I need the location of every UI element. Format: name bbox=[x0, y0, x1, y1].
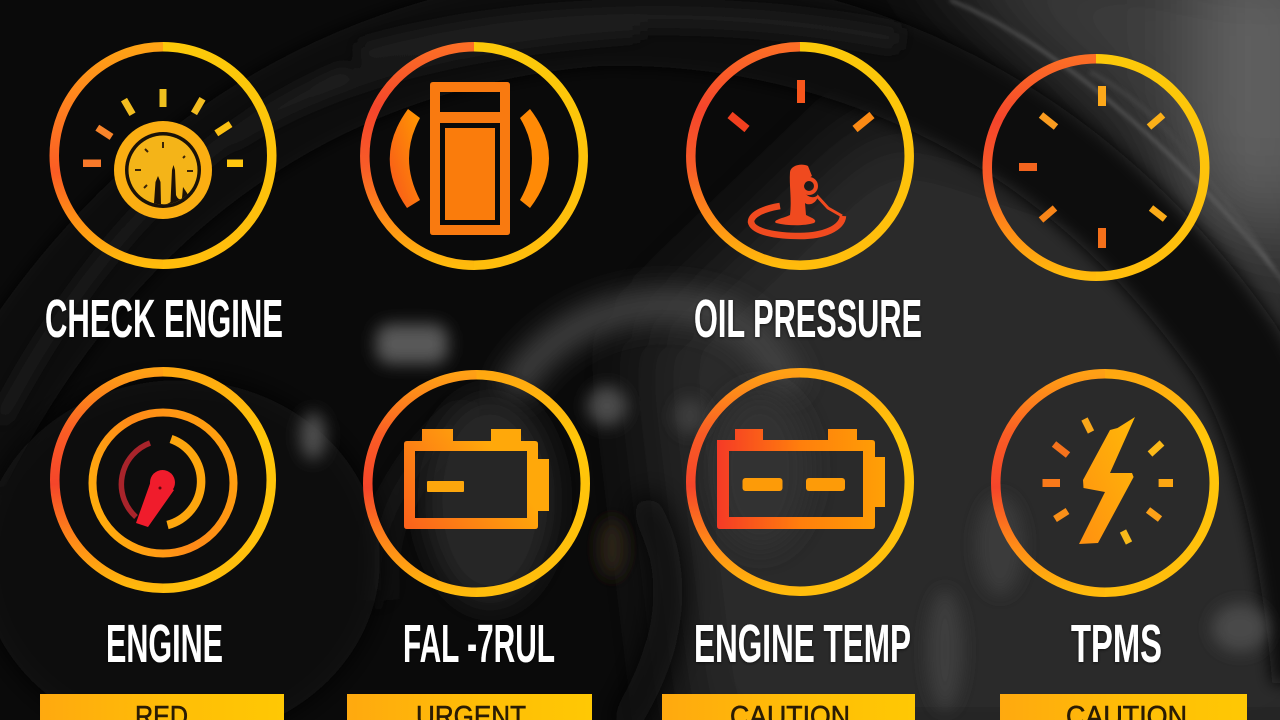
icon: left arc bbox=[390, 109, 420, 208]
label: ENGINE TEMP: ENGINE TEMP bbox=[694, 614, 911, 674]
ring bbox=[996, 374, 1214, 592]
badge: RED bbox=[40, 694, 284, 720]
label: OIL PRESSURE: OIL PRESSURE bbox=[694, 289, 922, 349]
label: TPMS: TPMS bbox=[1071, 614, 1162, 674]
ring bbox=[691, 373, 909, 591]
icon: pump body bbox=[430, 82, 510, 235]
icon: radiating ticks bbox=[83, 89, 243, 167]
label: ENGINE: ENGINE bbox=[106, 614, 223, 674]
icon: engine dial bbox=[114, 121, 212, 219]
badge: URGENT bbox=[347, 694, 592, 720]
ring bbox=[368, 375, 585, 592]
badge: CAUTION bbox=[1000, 694, 1247, 720]
label: CHECK ENGINE: CHECK ENGINE bbox=[45, 289, 283, 349]
icon: battery bbox=[404, 429, 549, 529]
icon: right arc bbox=[168, 439, 201, 525]
panel: engine gauge bbox=[55, 372, 271, 588]
icon: bolt bbox=[1079, 417, 1135, 544]
panel: oil pressure bbox=[691, 47, 909, 265]
panel: fuel door unlabelled light bbox=[365, 47, 583, 265]
label: FAL -7RUL: FAL -7RUL bbox=[403, 614, 555, 674]
panel: battery two dashes bbox=[691, 373, 909, 591]
ring bbox=[54, 47, 272, 264]
icon: faded red arc bbox=[121, 443, 150, 517]
ring bbox=[55, 372, 271, 588]
icon: inner ring bbox=[92, 412, 234, 554]
panel: battery one dash bbox=[368, 375, 585, 592]
icon: battery bbox=[717, 429, 885, 529]
icon: bolt ticks bbox=[1042, 419, 1173, 543]
ring bbox=[365, 47, 583, 265]
badge: CAUTION bbox=[662, 694, 915, 720]
panel: check engine bbox=[54, 47, 272, 264]
ring bbox=[987, 59, 1205, 276]
panel: tpms bbox=[996, 374, 1214, 592]
icon: needle bbox=[136, 470, 175, 527]
icon: oil can bbox=[751, 165, 843, 236]
ring bbox=[691, 47, 909, 265]
icon: right arc bbox=[520, 109, 549, 208]
icon: gauge ticks bbox=[730, 80, 872, 129]
panel: blank gauge light bbox=[987, 59, 1205, 276]
icon: gauge ticks bbox=[1019, 86, 1165, 248]
